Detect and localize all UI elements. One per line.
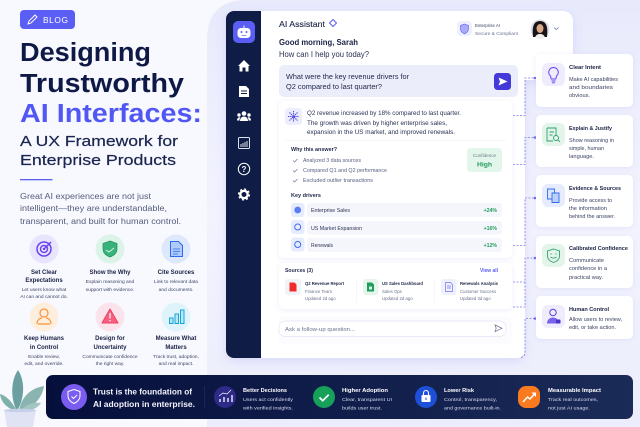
- principle: cite sources: [154, 234, 198, 293]
- intro paragraph: Great AI experiences are not just: [20, 192, 152, 201]
- trust banner: [46, 375, 633, 419]
- card: explain and justify: simple, human: [569, 146, 604, 152]
- benefit: better decisions: with verified insights.: [243, 406, 293, 412]
- card: clear intent: and boundaries: [569, 85, 613, 91]
- card: clear intent: Clear Intent: [569, 65, 601, 71]
- card: calibrated confidence: [536, 236, 633, 288]
- principle: cite sources: and documents.: [159, 287, 193, 293]
- trust statement: AI adoption in enterprise.: [93, 399, 195, 409]
- source: US sales dashboard: US Sales Dashboard: [382, 281, 423, 287]
- intro paragraph: transparent, and built for human control.: [20, 217, 181, 226]
- driver: enterprise sales: +24%: [484, 208, 497, 214]
- source: Q2 revenue report: Q2 Revenue Report: [305, 281, 344, 287]
- benefit: measurable impact: Measurable Impact: [548, 388, 601, 394]
- benefit: lower risk: and governance built-in.: [444, 406, 501, 412]
- principle: keep humans in control: [24, 302, 65, 367]
- answer card: [279, 101, 512, 258]
- key drivers: Key drivers: [291, 193, 321, 199]
- answer text: Q2 revenue increased by 18% compared to last quarter.: [307, 110, 461, 117]
- icon: settings: [239, 189, 249, 200]
- principle: measure what matters: and real impact.: [159, 361, 193, 367]
- source: US sales dashboard: [363, 279, 423, 301]
- principle: design for uncertainty: [82, 302, 138, 367]
- benefit: measurable impact: [518, 386, 601, 412]
- follow-up input: Ask a follow-up question...: [285, 327, 355, 333]
- card: evidence and sources: behind the answer.: [569, 214, 615, 220]
- driver: US market expansion: +16%: [484, 226, 497, 232]
- principle: keep humans in control: Enable review,: [28, 354, 60, 360]
- principle: show the why: Explain reasoning and: [86, 279, 134, 285]
- benefit: better decisions: Users act confidently: [243, 397, 294, 403]
- greeting: How can I help you today?: [279, 50, 370, 59]
- subtitle: [20, 134, 178, 169]
- card: evidence and sources: Provide access to: [569, 198, 612, 204]
- subtitle: Enterprise Products: [20, 153, 176, 169]
- header: assistant name: AI Assistant: [279, 19, 326, 29]
- icon: people: [237, 111, 251, 121]
- card: human control: Human Control: [569, 307, 609, 313]
- why this answer: Excluded outlier transactions: [303, 178, 373, 184]
- icon: home: [238, 60, 250, 72]
- icon: analytics: [238, 138, 250, 148]
- card: human control: [536, 296, 633, 339]
- blog badge: BLOG: [43, 15, 68, 25]
- icon: help: [238, 163, 250, 175]
- card: explain and justify: Explain & Justify: [569, 126, 613, 132]
- benefit: higher adoption: Higher Adoption: [342, 388, 388, 394]
- card: evidence and sources: Evidence & Sources: [569, 186, 622, 192]
- icon: document: [239, 86, 249, 97]
- sources card: View all: [480, 268, 499, 274]
- card: calibrated confidence: Communicate: [569, 258, 604, 264]
- benefit: better decisions: Better Decisions: [243, 388, 287, 394]
- principle: set clear expectations: Let users know what: [22, 287, 67, 293]
- principle: set clear expectations: [20, 234, 68, 300]
- user avatar: [530, 20, 559, 39]
- card: evidence and sources: [536, 175, 633, 227]
- why this answer: Compared Q1 and Q2 performance: [303, 168, 387, 174]
- benefit: measurable impact: not just AI usage.: [548, 406, 590, 412]
- principle: set clear expectations: Set Clear: [31, 270, 58, 276]
- source: renewals analysis: Customer Success: [460, 289, 496, 294]
- driver: enterprise sales: Enterprise Sales: [311, 208, 350, 214]
- source: Q2 revenue report: Updated 2d ago: [305, 296, 336, 301]
- plant illustration: [0, 370, 44, 427]
- icon: assistant bot: [233, 21, 255, 43]
- card: clear intent: obvious.: [569, 93, 590, 99]
- card: explain and justify: language.: [569, 154, 594, 160]
- principle: keep humans in control: Keep Humans: [24, 336, 65, 342]
- follow-up input: [279, 316, 512, 344]
- card: calibrated confidence: practical way.: [569, 275, 603, 281]
- card: evidence and sources: the information: [569, 206, 607, 212]
- benefit: better decisions: [214, 386, 294, 412]
- title: AI Interfaces:: [20, 100, 202, 128]
- answer text: expansion in the US market, and improved renewals.: [307, 129, 455, 136]
- principle: keep humans in control: edit, and override.: [24, 361, 64, 367]
- blog badge: [20, 10, 75, 29]
- icon: light bulb: [542, 63, 565, 86]
- source: Q2 revenue report: [285, 279, 344, 301]
- principle: show the why: [86, 234, 134, 293]
- driver: renewals: +12%: [484, 243, 497, 249]
- enterprise AI status: [457, 21, 519, 37]
- principle: show the why: support with evidence.: [86, 287, 134, 293]
- benefit: lower risk: Lower Risk: [444, 388, 474, 394]
- principle: set clear expectations: Expectations: [25, 278, 63, 284]
- why this answer: [291, 147, 387, 184]
- principle: cite sources: Link to relevant data: [154, 279, 198, 285]
- driver: renewals: Renewals: [311, 243, 333, 249]
- card: clear intent: [536, 54, 633, 107]
- benefit: measurable impact: Track real outcomes,: [548, 397, 598, 403]
- driver: enterprise sales: [291, 203, 502, 217]
- principle: design for uncertainty: Communicate confidence: [82, 354, 138, 360]
- icon: documents: [542, 184, 565, 207]
- benefit: higher adoption: Clear, transparent UI: [342, 397, 392, 403]
- title: Designing: [20, 39, 151, 67]
- sources card: [279, 263, 512, 309]
- card: calibrated confidence: Calibrated Confidence: [569, 246, 629, 252]
- key drivers: [291, 193, 502, 252]
- card: clear intent: Make AI capabilities: [569, 77, 618, 83]
- why this answer: Why this answer?: [291, 147, 337, 153]
- driver: US market expansion: [291, 220, 502, 234]
- answer text: [307, 110, 461, 136]
- principle: measure what matters: Matters: [165, 345, 187, 351]
- driver: renewals: [291, 238, 502, 252]
- question bubble: Q2 compared to last quarter?: [286, 82, 382, 91]
- benefit: lower risk: [415, 386, 501, 412]
- intro paragraph: intelligent—they are understandable,: [20, 204, 167, 213]
- confidence badge: [467, 148, 502, 172]
- why this answer: Analyzed 3 data sources: [303, 158, 361, 164]
- card: explain and justify: [536, 115, 633, 167]
- icon: document search: [542, 123, 565, 146]
- principle: cite sources: Cite Sources: [158, 270, 195, 276]
- card: human control: edit, or take action.: [569, 325, 616, 331]
- title: [20, 39, 202, 128]
- principle: keep humans in control: in Control: [30, 345, 58, 351]
- intro paragraph: [20, 192, 181, 226]
- send button: [494, 73, 511, 90]
- principle: measure what matters: Track trust, adoption,: [153, 354, 199, 360]
- card: explain and justify: Show reasoning in: [569, 138, 614, 144]
- icon: smiling shield: [542, 244, 565, 267]
- connectors: [513, 77, 536, 358]
- principle: set clear expectations: AI can and cannot do.: [20, 294, 68, 300]
- enterprise AI status: Secure & Compliant: [475, 31, 519, 37]
- icon: help: ?: [242, 165, 247, 174]
- enterprise AI status: Enterprise AI: [475, 23, 500, 29]
- principle: design for uncertainty: the right way.: [96, 361, 124, 367]
- confidence badge: High: [477, 162, 492, 168]
- trust statement: Trust is the foundation of: [93, 386, 192, 396]
- icon: person with lock: [542, 305, 565, 328]
- principle: design for uncertainty: Design for: [95, 336, 125, 342]
- greeting: Good morning, Sarah: [279, 37, 358, 47]
- principle: measure what matters: Measure What: [156, 336, 196, 342]
- principle: design for uncertainty: Uncertainty: [93, 345, 127, 351]
- confidence badge: Confidence: [473, 153, 497, 158]
- greeting: [279, 37, 370, 59]
- subtitle: A UX Framework for: [20, 134, 178, 150]
- answer text: The growth was driven by higher enterprise sales,: [307, 120, 447, 127]
- source: renewals analysis: Renewals Analysis: [460, 281, 498, 287]
- card: calibrated confidence: confidence in a: [569, 266, 608, 272]
- principle: show the why: Show the Why: [90, 270, 131, 276]
- source: renewals analysis: Updated 3d ago: [460, 296, 491, 301]
- source: US sales dashboard: Updated 2d ago: [382, 296, 413, 301]
- benefit: higher adoption: builds user trust.: [342, 406, 382, 412]
- sources card: Sources (3): [285, 268, 313, 274]
- title: Trustworthy: [20, 70, 185, 98]
- principle: measure what matters: [153, 302, 199, 367]
- trust statement: [61, 384, 195, 410]
- app window: [226, 11, 573, 358]
- question bubble: [279, 65, 518, 97]
- source: US sales dashboard: Sales Ops: [382, 289, 402, 294]
- card: human control: Allow users to review,: [569, 317, 622, 323]
- source: renewals analysis: [441, 279, 498, 301]
- benefit: higher adoption: [313, 386, 392, 412]
- sidebar: [226, 11, 261, 358]
- question bubble: What were the key revenue drivers for: [286, 72, 409, 81]
- driver: US market expansion: US Market Expansion: [311, 226, 362, 232]
- answer icon: [285, 108, 302, 125]
- benefit: lower risk: Control, transparency,: [444, 397, 497, 403]
- source: Q2 revenue report: Finance Team: [305, 289, 332, 294]
